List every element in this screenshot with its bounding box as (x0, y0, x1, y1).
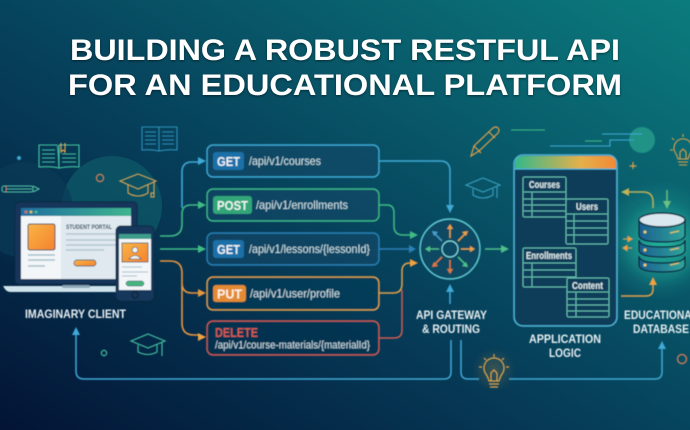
icon: pencil (2, 186, 39, 192)
request: GET lessons: GET (217, 242, 240, 257)
arrowheads: client to requests (198, 157, 206, 341)
label: gateway (416, 310, 487, 336)
request: POST enrollments: /api/v1/enrollments (256, 198, 348, 212)
request: GET lessons (207, 233, 379, 265)
icon: bottom lightbulb (472, 348, 516, 392)
label: database (624, 310, 690, 336)
icon: orange ring (678, 354, 686, 364)
table: courses (523, 177, 566, 217)
icon: top-right lightbulb (670, 134, 690, 165)
request: DELETE materials: DELETE (215, 325, 258, 340)
portal image (28, 224, 55, 250)
arrows: small exchange (623, 236, 632, 250)
icon: amber graduation cap (120, 174, 156, 197)
arrow: gateway to logic (485, 245, 509, 253)
icon: pencil top (471, 127, 499, 156)
table: content: Content (572, 281, 604, 292)
arrow: up into gateway (446, 284, 454, 304)
arrow: logic to database (621, 277, 657, 296)
arrow: into database (663, 190, 671, 209)
label: gateway: API GATEWAY (416, 310, 487, 322)
request: PUT profile (207, 277, 379, 310)
label: application logic: LOGIC (549, 348, 581, 360)
table: users (566, 199, 608, 244)
request: GET courses (207, 145, 379, 177)
client: laptop (3, 202, 137, 292)
request: DELETE materials: /api/v1/course-materials/{materialId} (215, 340, 370, 352)
request: PUT profile: PUT (217, 286, 242, 302)
gateway (420, 219, 480, 279)
table: content (567, 278, 609, 317)
client: phone (116, 226, 154, 301)
title: FOR AN EDUCATIONAL PLATFORM (68, 69, 622, 102)
portal heading: STUDENT PORTAL (66, 225, 112, 231)
request: POST enrollments (207, 189, 379, 221)
request: DELETE materials (207, 321, 379, 355)
arrowheads: to gateway (409, 205, 454, 267)
icon: green open book (39, 143, 79, 168)
icon: plus (630, 162, 636, 169)
table: users: Users (576, 202, 598, 213)
request: PUT profile: /api/v1/user/profile (250, 286, 340, 300)
label: application logic: APPLICATION (529, 334, 601, 346)
arrow: database to logic (621, 188, 653, 208)
icon: ring (96, 174, 104, 182)
arrows: client to requests (160, 162, 198, 335)
icon: small green ring (101, 350, 107, 356)
panel: application logic (514, 155, 617, 326)
label: application logic (529, 334, 601, 360)
table: enrollments: Enrollments (526, 251, 572, 262)
icon: blue open book (142, 127, 177, 151)
portal button (74, 260, 96, 266)
decorative circuit lines (511, 127, 655, 153)
icon: teal graduation cap (466, 178, 500, 198)
icon: bottom graduation cap (131, 334, 165, 356)
label: gateway: & ROUTING (422, 324, 480, 336)
loop arrow: gateway to client (72, 327, 451, 379)
database (618, 199, 690, 287)
icon: small dot (17, 156, 21, 160)
loop arrow: gateway to database (461, 340, 666, 379)
table: courses: Courses (529, 180, 560, 191)
decorative backdrop circles (0, 156, 690, 300)
request: GET courses: GET (217, 154, 240, 169)
label: client: IMAGINARY CLIENT (25, 309, 126, 321)
arrows: requests to gateway (379, 161, 450, 338)
title (68, 34, 622, 102)
request: GET lessons: /api/v1/lessons/{lessonId} (249, 242, 370, 256)
request: POST enrollments: POST (217, 198, 248, 213)
table: enrollments (523, 248, 576, 287)
title: BUILDING A ROBUST RESTFUL API (70, 34, 620, 67)
request: GET courses: /api/v1/courses (249, 154, 321, 168)
